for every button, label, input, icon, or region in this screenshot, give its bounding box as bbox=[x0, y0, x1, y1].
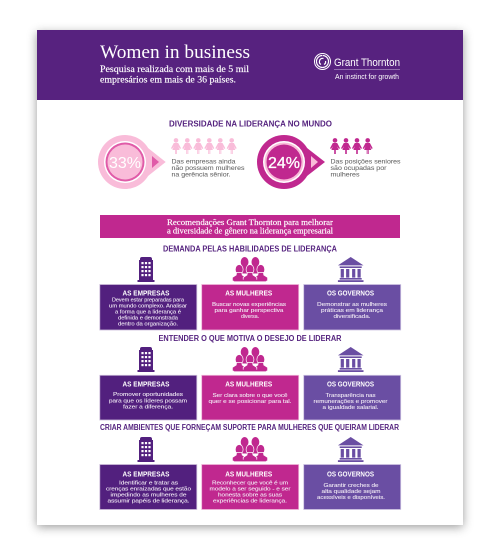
box: mulheres 3: honesta sobre as suas bbox=[218, 493, 282, 499]
icon: building bbox=[138, 257, 154, 282]
box: mulheres 3: Reconhecer que você é um bbox=[212, 480, 288, 486]
icon: building bbox=[138, 347, 154, 372]
icon: government building bbox=[338, 257, 364, 282]
text: 33% caption: Das empresas ainda bbox=[172, 158, 236, 166]
box: mulheres 1: para ganhar perspectiva bbox=[214, 308, 284, 314]
box: governos 2: Transparência nas bbox=[326, 393, 376, 399]
box: empresas 2 bbox=[100, 375, 197, 420]
box: governos 1: OS GOVERNOS bbox=[327, 291, 374, 298]
box: empresas 2: AS EMPRESAS bbox=[122, 382, 170, 389]
box: governos 1 bbox=[304, 284, 401, 330]
subtitle: Pesquisa realizada com mais de 5 mil bbox=[100, 64, 249, 75]
box: empresas 1: definida e demonstrada bbox=[118, 316, 179, 322]
box: governos 1: diversificada. bbox=[334, 314, 371, 320]
box: mulheres 1 bbox=[202, 284, 299, 330]
icon: women group bbox=[232, 437, 268, 461]
logo: Grant Thornton: Grant Thornton bbox=[334, 57, 400, 69]
box: governos 2: remunerações e promover bbox=[314, 399, 388, 405]
box: empresas 3: impedindo as mulheres de bbox=[110, 493, 186, 499]
text: 33% caption: não possuem mulheres bbox=[172, 165, 244, 172]
icons: six women bbox=[171, 138, 237, 154]
box: mulheres 3: experiências de liderança. bbox=[213, 499, 287, 505]
box: governos 2: a igualdade salarial. bbox=[322, 405, 379, 411]
box: mulheres 1: Buscar novas experiências bbox=[212, 302, 286, 308]
text: 24% caption: mulheres bbox=[330, 172, 360, 178]
stat badge: 24% bbox=[257, 135, 325, 189]
box: empresas 1: AS EMPRESAS bbox=[122, 291, 170, 298]
box: mulheres 1: diversa. bbox=[241, 314, 259, 320]
icon: women group bbox=[232, 347, 268, 371]
box: governos 3: OS GOVERNOS bbox=[327, 471, 374, 478]
box: governos 3 bbox=[304, 464, 401, 510]
box: governos 3: Garantir creches de bbox=[324, 483, 378, 489]
box: empresas 1: um mundo complexo. Analisar bbox=[109, 304, 187, 310]
icon: building bbox=[138, 437, 154, 462]
subtitle: empresários em mais de 36 países. bbox=[100, 74, 236, 86]
heading: diversidade: DIVERSIDADE NA LIDERANÇA NO MUNDO bbox=[169, 120, 332, 128]
box: empresas 3: assumir papéis de liderança. bbox=[108, 499, 190, 505]
recommendations banner: Recomendações Grant Thornton para melhorar bbox=[167, 218, 333, 227]
text: 24% caption: são ocupadas por bbox=[330, 165, 386, 172]
heading: section 2: ENTENDER O QUE MOTIVA O DESEJO DE LIDERAR bbox=[158, 334, 342, 343]
text: 33% caption bbox=[172, 158, 244, 178]
box: mulheres 1: AS MULHERES bbox=[225, 291, 273, 298]
box: governos 1: práticas em liderança bbox=[321, 308, 384, 314]
box: mulheres 2: Ser clara sobre o que você bbox=[212, 393, 288, 399]
box: mulheres 3: AS MULHERES bbox=[225, 471, 273, 478]
box: empresas 2: para que os líderes possam bbox=[109, 398, 187, 404]
text: 24% caption bbox=[330, 158, 400, 178]
box: empresas 2: fazer a diferença. bbox=[123, 404, 173, 410]
box: governos 2 bbox=[304, 375, 401, 420]
box: mulheres 2 bbox=[202, 375, 299, 420]
box: mulheres 3 bbox=[202, 464, 299, 510]
icon: women group bbox=[232, 257, 268, 281]
stat badge: 24%: 24% bbox=[268, 155, 300, 172]
icons: four women bbox=[330, 138, 373, 154]
icon: government building bbox=[338, 347, 364, 372]
icon: government building bbox=[338, 437, 364, 462]
page card bbox=[37, 30, 463, 525]
box: empresas 3: crenças enraizadas que estão bbox=[106, 486, 191, 492]
box: mulheres 2: AS MULHERES bbox=[225, 382, 273, 389]
text: 33% caption: na gerência sênior. bbox=[172, 172, 231, 178]
stat badge: 33%: 33% bbox=[109, 155, 141, 172]
text: 24% caption: Das posições seniores bbox=[330, 158, 400, 166]
box: governos 3: alta qualidade sejam bbox=[322, 489, 381, 495]
box: mulheres 2: quer e se posicionar para tal. bbox=[208, 399, 292, 405]
stat badge: 33% bbox=[98, 135, 166, 189]
box: mulheres 3: modelo a ser seguido - e ser bbox=[210, 486, 291, 492]
logo: Grant Thornton: An instinct for growth bbox=[335, 74, 399, 81]
title: Women in business bbox=[100, 43, 250, 63]
header banner bbox=[37, 30, 463, 100]
box: governos 3: acessíveis e disponíveis. bbox=[317, 495, 385, 501]
box: empresas 3 bbox=[100, 464, 197, 510]
box: governos 1: Demonstrar as mulheres bbox=[317, 302, 387, 308]
box: governos 2: OS GOVERNOS bbox=[327, 382, 374, 389]
heading: section 1: DEMANDA PELAS HABILIDADES DE LIDERANÇA bbox=[163, 245, 337, 254]
box: empresas 3: Identificar e tratar as bbox=[119, 480, 178, 486]
box: empresas 1: a forma que a liderança é bbox=[115, 310, 181, 316]
subtitle bbox=[100, 64, 249, 86]
logo: Grant Thornton bbox=[314, 54, 400, 81]
recommendations banner: a diversidade de gênero na liderança empresarial bbox=[167, 226, 334, 236]
box: empresas 1: Devem estar preparadas para bbox=[112, 298, 185, 304]
recommendations banner bbox=[100, 215, 400, 238]
box: empresas 3: AS EMPRESAS bbox=[122, 471, 170, 478]
heading: section 3: CRIAR AMBIENTES QUE FORNEÇAM SUPORTE PARA MULHERES QUE QUEIRAM LIDERAR bbox=[100, 423, 399, 432]
box: empresas 1: dentro da organização. bbox=[118, 322, 178, 328]
box: empresas 2: Promover oportunidades bbox=[113, 392, 183, 398]
box: empresas 1 bbox=[100, 284, 197, 330]
